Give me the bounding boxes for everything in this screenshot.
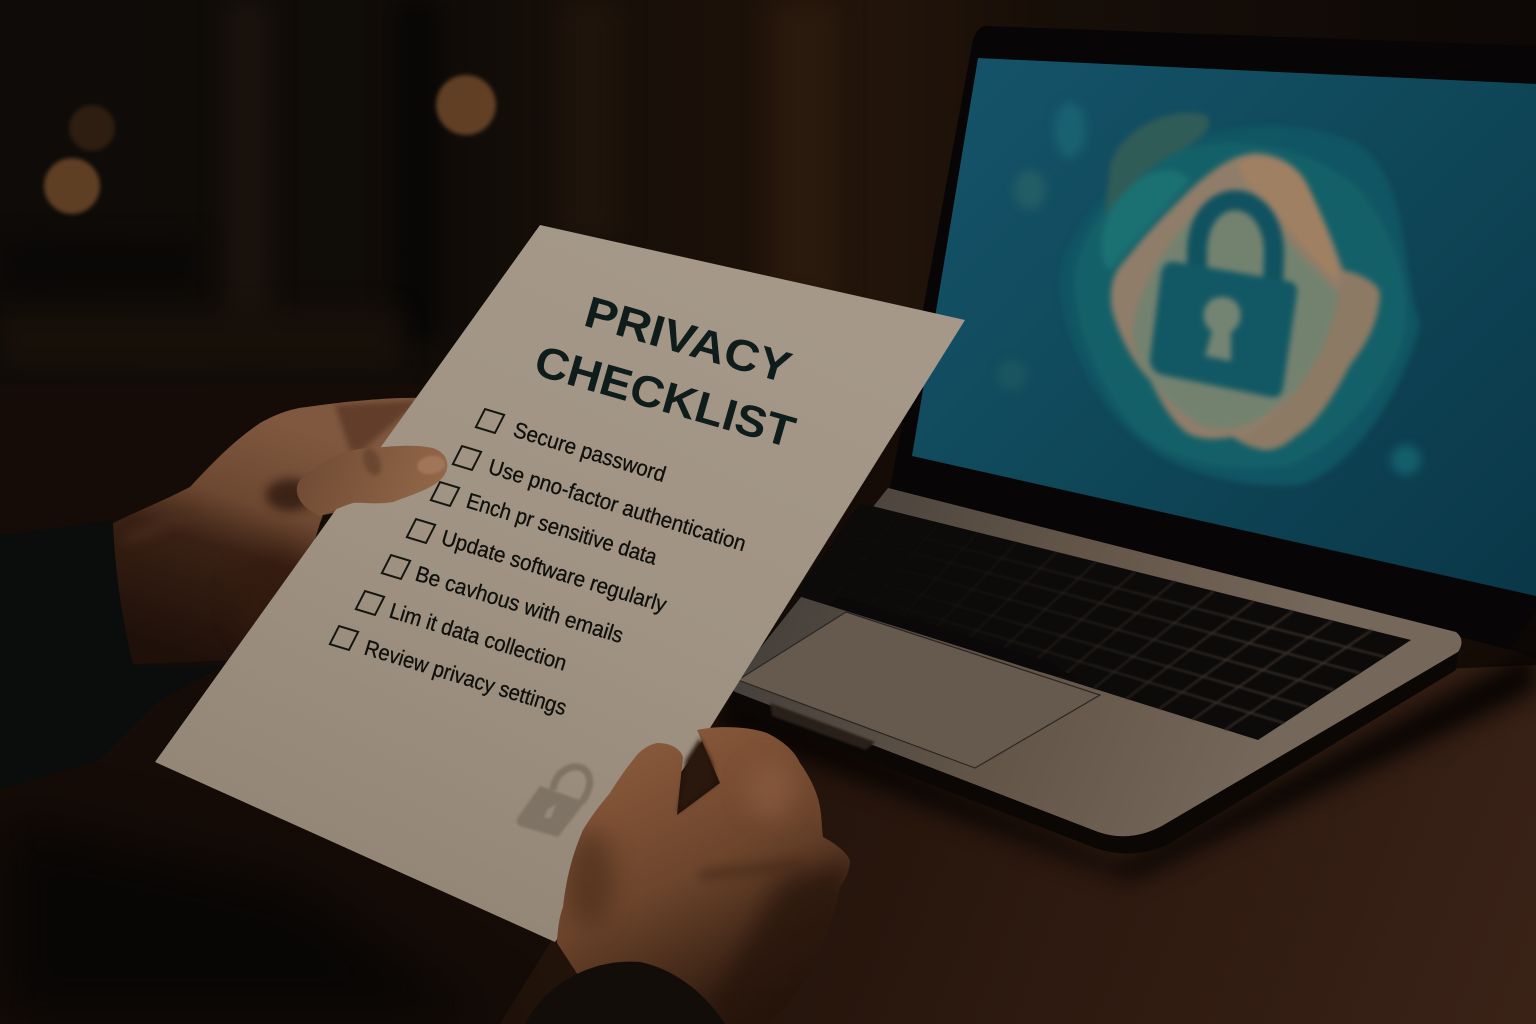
olive petal: [1105, 113, 1210, 215]
trackpad: [738, 612, 1100, 768]
peach and grey-green blob: [1111, 153, 1380, 450]
finger gap: [678, 738, 716, 812]
screen graphic: organic shapes and padlock: [996, 102, 1421, 486]
checklist items: Secure password: [511, 417, 669, 487]
checklist items: Review privacy settings: [362, 635, 570, 720]
inner teal blob: [1075, 143, 1406, 468]
laptop base: [732, 488, 1462, 836]
padlock keyhole: [1204, 297, 1241, 361]
index finger shadow: [335, 400, 420, 452]
right sleeve: [525, 962, 725, 1024]
right hand: [557, 727, 850, 1007]
checklist items: Ench pr sensitive data: [464, 488, 661, 570]
knuckle shadow: [266, 479, 314, 511]
wooden table: [0, 385, 1536, 1024]
watermark padlock: [517, 767, 590, 837]
left sleeve: [0, 520, 225, 790]
checkboxes: [330, 409, 504, 650]
dark lower-right shading: [718, 856, 850, 1004]
grey-green centre: [1133, 207, 1342, 429]
checklist items: Be cavhous with emails: [413, 561, 626, 648]
title: CHECKLIST: [529, 337, 800, 458]
laptop shadow: [715, 650, 1536, 880]
checklist items: Lim it data collection: [387, 598, 570, 676]
left hand: [113, 398, 416, 664]
checklist items: Update software regularly: [439, 525, 670, 617]
outer teal blob: [1060, 125, 1420, 486]
checklist items: [362, 417, 749, 720]
laptop screen: [912, 58, 1536, 596]
bokeh lights: [44, 75, 496, 214]
checklist items: Use pno-factor authentication: [486, 454, 749, 556]
laptop: [715, 26, 1536, 880]
title: [529, 288, 800, 458]
laptop lid: [890, 26, 1536, 650]
orange accent: [1239, 158, 1340, 285]
bright teal highlight: [1101, 170, 1190, 270]
padlock body: [1150, 262, 1297, 397]
left thumb over paper: [297, 446, 447, 516]
knuckle crease: [700, 865, 800, 875]
thumb nail: [416, 454, 446, 476]
paper sheet: [155, 225, 965, 942]
keyboard: [795, 503, 1411, 740]
right warm band: [1298, 298, 1343, 434]
padlock shackle: [1197, 200, 1274, 285]
laptop front notch: [770, 703, 875, 750]
title: PRIVACY: [579, 288, 797, 393]
base front edge: [728, 652, 1458, 854]
checklist paper: [155, 225, 965, 942]
